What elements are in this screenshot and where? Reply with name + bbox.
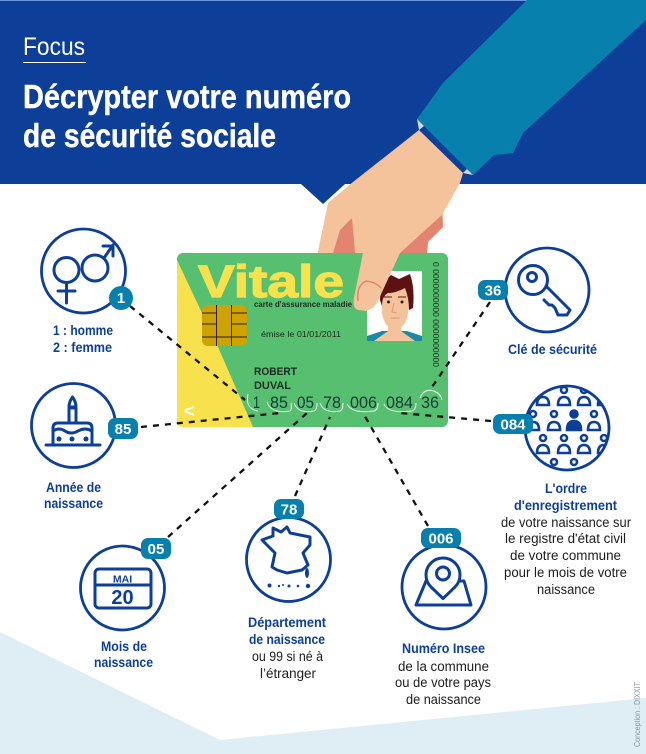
title: de sécurité sociale bbox=[23, 117, 276, 154]
social security number: 084 bbox=[386, 393, 413, 412]
icon: key bbox=[505, 248, 589, 332]
Vitale card bbox=[177, 253, 448, 427]
label: ordre d'enregistrement: pour le mois de votre bbox=[504, 565, 627, 580]
social security number: 36 bbox=[421, 393, 439, 412]
title: Décrypter votre numéro bbox=[23, 78, 351, 115]
icon: map pin bbox=[402, 545, 486, 629]
label: ordre d'enregistrement bbox=[501, 480, 631, 597]
social security number: 85 bbox=[270, 393, 288, 412]
vertical serial number: 0000000000 0000000000 0 bbox=[432, 261, 441, 367]
header band bbox=[0, 0, 646, 204]
label: numéro Insee: de naissance bbox=[406, 692, 481, 707]
social security number bbox=[247, 390, 442, 412]
panel: gender digit bbox=[42, 229, 133, 355]
heading: Focus: Focus bbox=[23, 33, 85, 61]
social security number: 05 bbox=[297, 393, 314, 412]
social security number: 1 bbox=[253, 393, 260, 412]
badge: 006 bbox=[421, 528, 461, 548]
title bbox=[23, 78, 351, 154]
label: département de naissance: Département bbox=[248, 614, 326, 630]
label: ordre d'enregistrement: L'ordre bbox=[545, 480, 587, 496]
panel: department bbox=[246, 499, 330, 681]
dashed connectors bbox=[130, 302, 491, 537]
panel: registration order bbox=[493, 386, 631, 597]
credit: Conception : DIXXIT bbox=[633, 682, 642, 747]
label: homme / femme: 1 : homme bbox=[53, 322, 113, 338]
panel: birth year bbox=[32, 384, 138, 511]
label: mois de naissance: naissance bbox=[94, 654, 153, 670]
icon: gender symbols bbox=[42, 229, 126, 313]
portrait photo bbox=[367, 271, 422, 341]
label: département de naissance: l’étranger bbox=[260, 666, 317, 681]
holder name: DUVAL bbox=[254, 380, 291, 392]
badge: 78: 78 bbox=[281, 502, 297, 518]
label: ordre d'enregistrement: d'enregistrement bbox=[514, 497, 617, 513]
icon: crowd of people bbox=[525, 386, 617, 470]
label: ordre d'enregistrement: naissance bbox=[537, 582, 595, 597]
label: ordre d'enregistrement: de votre naissance sur bbox=[501, 515, 631, 530]
label: homme / femme: 2 : femme bbox=[53, 339, 112, 355]
label: département de naissance bbox=[248, 614, 326, 681]
label: année de naissance bbox=[44, 479, 103, 511]
badge: 36: 36 bbox=[485, 282, 501, 300]
holder name bbox=[254, 366, 297, 392]
label: mois de naissance: Mois de bbox=[101, 638, 147, 654]
background wedge bbox=[0, 632, 646, 754]
label: année de naissance: Année de bbox=[46, 479, 101, 495]
finger on card bbox=[354, 253, 400, 311]
label: clé de sécurité: Clé de sécurité bbox=[508, 341, 597, 357]
hand and sleeve bbox=[317, 0, 646, 256]
badge: 084: 084 bbox=[500, 416, 526, 434]
card subtitle: carte d'assurance maladie bbox=[254, 300, 353, 309]
badge: 85: 85 bbox=[115, 421, 131, 438]
card logo: Vitale: Vitale bbox=[198, 256, 344, 307]
label: numéro Insee: de la commune bbox=[398, 659, 489, 674]
badge: 006: 006 bbox=[428, 530, 454, 548]
label: ordre d'enregistrement: le registre d'état civil bbox=[505, 531, 626, 546]
label: ordre d'enregistrement: de votre commune bbox=[510, 548, 621, 563]
social security number: 78 bbox=[323, 393, 341, 412]
badge: 084 bbox=[493, 414, 533, 434]
social security number: 006 bbox=[350, 393, 377, 412]
label: année de naissance: naissance bbox=[44, 495, 103, 511]
icon: calendar: 20 bbox=[111, 587, 134, 609]
label: numéro Insee: Numéro Insee bbox=[402, 640, 485, 656]
label: homme / femme bbox=[53, 322, 113, 355]
icon: calendar bbox=[80, 546, 164, 630]
icon: map of France bbox=[246, 518, 330, 602]
badge: 78 bbox=[274, 499, 304, 519]
label: numéro Insee bbox=[395, 640, 491, 707]
badge: 1: 1 bbox=[117, 290, 125, 307]
badge: 05: 05 bbox=[148, 541, 164, 558]
label: mois de naissance bbox=[94, 638, 153, 670]
panel: security key bbox=[478, 248, 597, 357]
chip bbox=[202, 305, 247, 346]
panel: month bbox=[80, 538, 171, 670]
issue date: émise le 01/01/2011 bbox=[261, 329, 341, 339]
holder name: ROBERT bbox=[254, 366, 297, 378]
panel: INSEE number bbox=[395, 528, 491, 707]
chevron mark: < bbox=[184, 401, 195, 421]
label: numéro Insee: ou de votre pays bbox=[395, 675, 491, 690]
icon: calendar: MAI bbox=[113, 574, 132, 586]
label: département de naissance: de naissance bbox=[249, 631, 325, 647]
icon: birthday cake bbox=[32, 384, 116, 468]
label: département de naissance: ou 99 si né à bbox=[252, 649, 323, 664]
